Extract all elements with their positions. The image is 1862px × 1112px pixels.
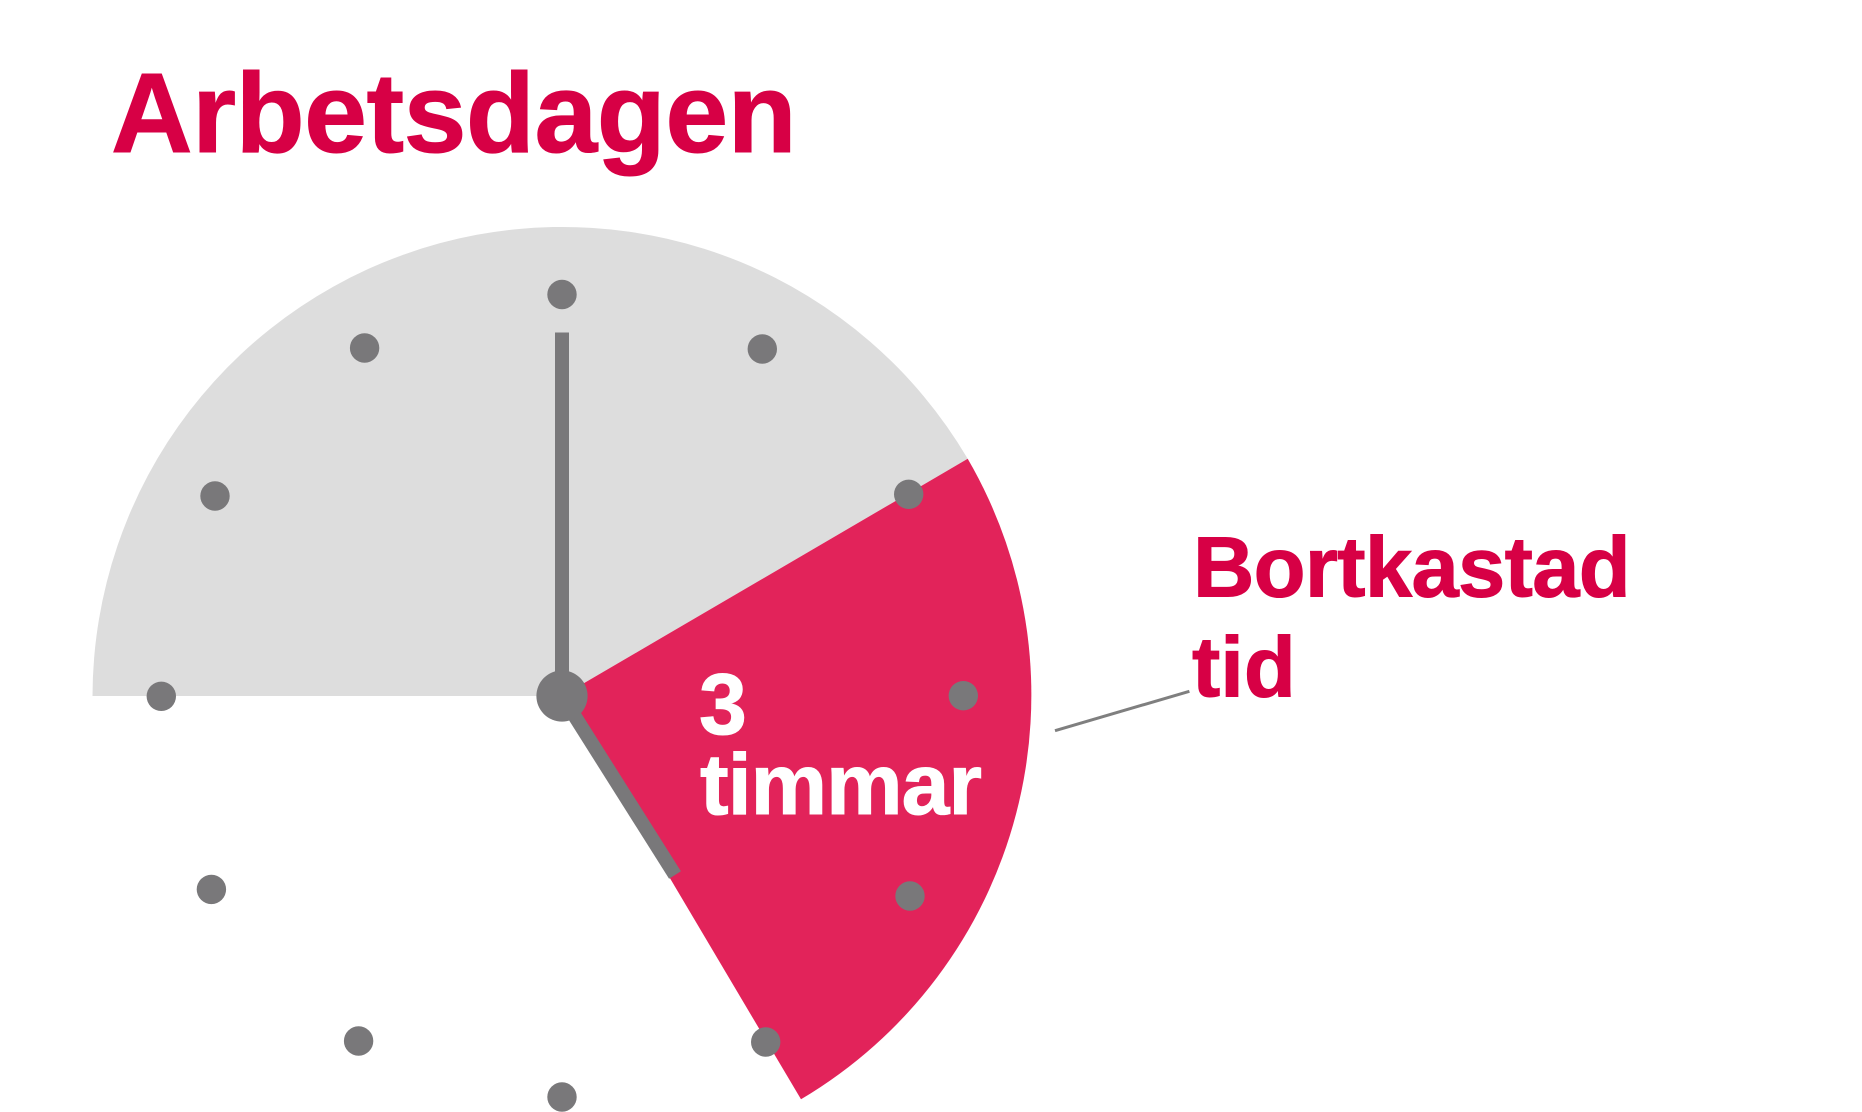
clock sector: remaining workday (grey): [92, 227, 968, 696]
sector label: 3 timmar: timmar: [700, 737, 982, 833]
clock hand: hour: [562, 696, 675, 875]
callout label: Bortkastad tid: Bortkastad: [1193, 520, 1630, 616]
clock hub: [536, 670, 588, 722]
callout label: Bortkastad tid: tid: [1192, 620, 1296, 716]
callout label: Bortkastad tid: [1192, 520, 1630, 716]
clock hand: minute: [555, 332, 569, 682]
clock face: [92, 227, 1031, 1112]
callout leader line: [1055, 691, 1189, 731]
sector label: 3 timmar: 3: [699, 657, 747, 753]
title: Arbetsdagen: [111, 50, 796, 176]
clock sector: 3 hours wasted (red): [562, 459, 1031, 1099]
sector label: 3 timmar: [699, 657, 982, 833]
hour dots: [147, 280, 978, 1112]
